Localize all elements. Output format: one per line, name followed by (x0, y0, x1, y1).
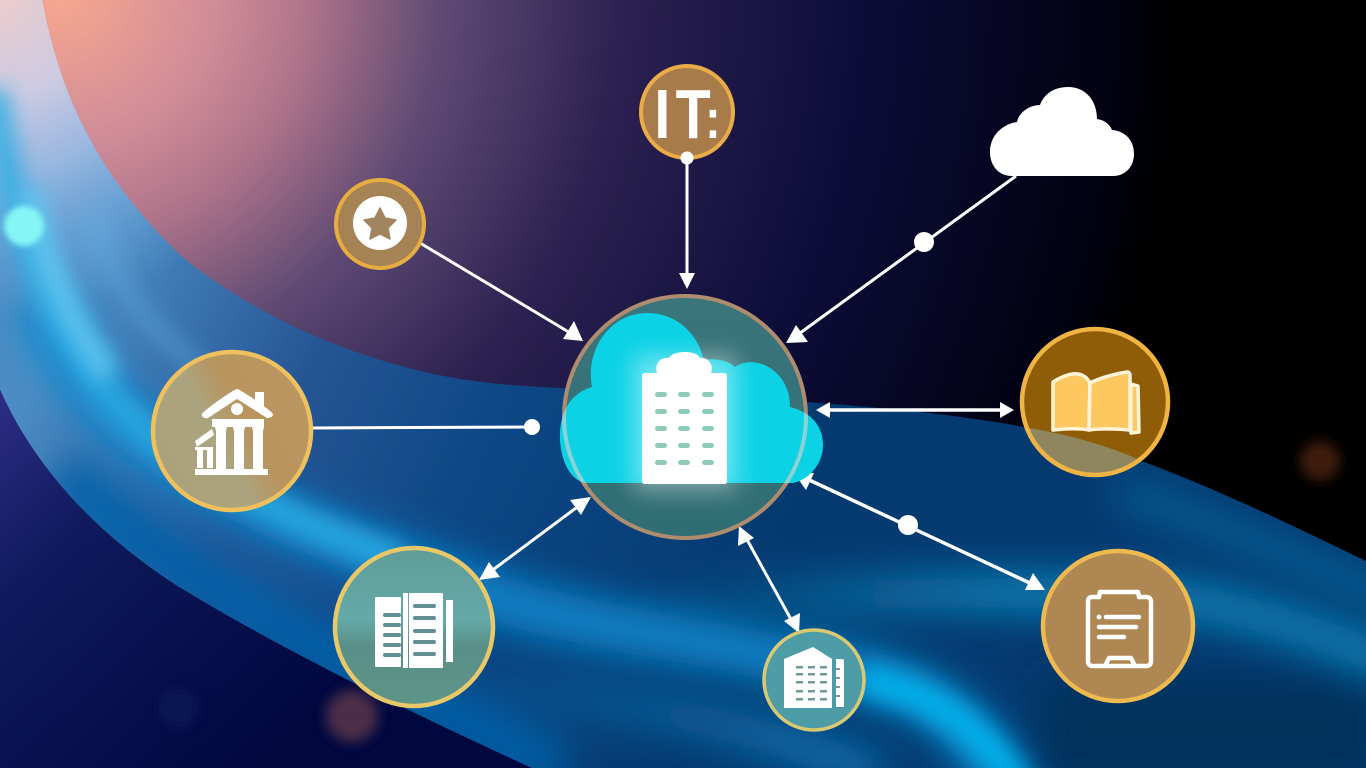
central hub: cloud with building (560, 295, 823, 539)
arrow: star node to hub (420, 243, 583, 341)
icon: book (1053, 372, 1139, 433)
node: star badge (336, 180, 424, 268)
arrow: document to hub (479, 497, 591, 580)
decorative bokeh: orange light (1300, 441, 1340, 481)
node: cloud icon (990, 87, 1134, 176)
icon: bank building (195, 389, 273, 475)
arrow: bank to hub (312, 419, 540, 435)
arrow: clipboard to hub (794, 473, 1045, 590)
icon: apartment block (784, 647, 844, 708)
hub glow (634, 356, 736, 490)
node: small building (764, 630, 864, 730)
node: document pages (335, 548, 493, 706)
hub ring over cloud (562, 408, 808, 483)
hub building (642, 352, 727, 484)
IT text: I (654, 75, 670, 153)
node: bank (153, 352, 311, 510)
arrow: small building to hub (738, 526, 800, 633)
icon: clipboard (1088, 592, 1151, 666)
decorative bokeh: faint blue light (158, 688, 198, 728)
arrow: book to hub (816, 402, 1014, 418)
node: IT label (641, 66, 733, 158)
decorative bokeh: cyan light (4, 206, 44, 246)
IT text: : (705, 88, 720, 150)
node: clipboard (1043, 551, 1193, 701)
icon: pages (375, 593, 453, 668)
arrow: IT node to hub (679, 152, 695, 289)
hub cloud (560, 313, 823, 483)
decorative bokeh: purple light (326, 690, 378, 742)
IT text: T (676, 75, 711, 153)
hub disc (563, 295, 807, 539)
node: open book (1020, 326, 1170, 478)
icon: star (364, 208, 396, 239)
arrow: cloud to hub (786, 176, 1016, 343)
hub ring (564, 296, 806, 538)
